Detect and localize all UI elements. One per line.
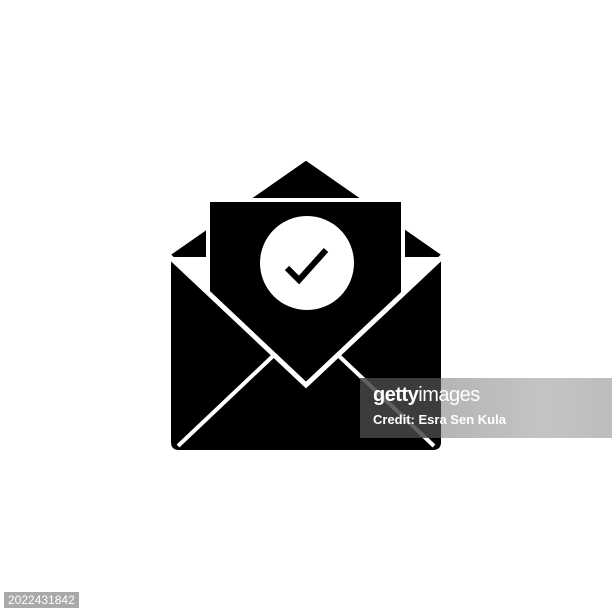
watermark: gettyimages [373,384,480,406]
watermark [360,378,612,438]
letter [206,198,405,388]
watermark: Credit: Esra Sen Kula [373,412,506,427]
icon: check circle [260,216,354,310]
envelope front [169,256,443,450]
envelope back flap [171,162,441,256]
image id tag: 2022431842 [8,593,75,607]
